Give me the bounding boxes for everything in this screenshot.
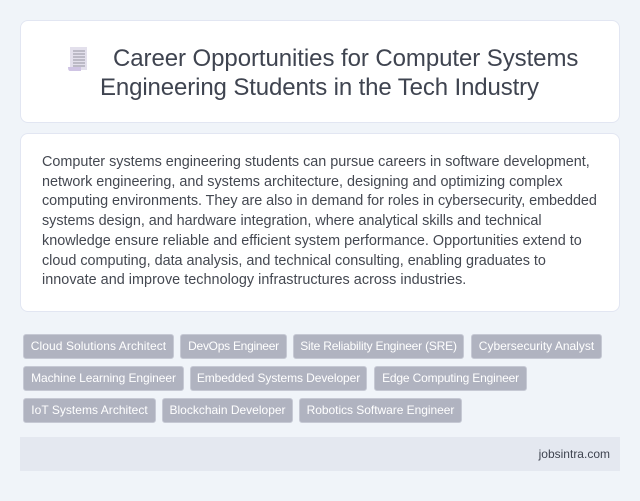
title line 1: Career Opportunities for Computer Systems xyxy=(113,45,578,72)
icon: document scroll xyxy=(68,47,87,71)
footer source text: jobsintra.com xyxy=(539,447,610,461)
tag list: Machine Learning Engineer xyxy=(31,371,176,385)
tag list: Embedded Systems Developer xyxy=(197,371,360,385)
description text: computing environments. They are also in demand for roles in cybersecurity, embedded xyxy=(42,193,597,209)
tag list: Cybersecurity Analyst xyxy=(479,339,594,353)
tag list: DevOps Engineer xyxy=(188,339,279,353)
tag list xyxy=(23,334,602,423)
description text: innovate and improve technology infrastructures across industries. xyxy=(42,272,466,288)
description text: Computer systems engineering students can pursue careers in software development, xyxy=(42,154,590,170)
tag list: Robotics Software Engineer xyxy=(307,403,454,417)
tag list: Edge Computing Engineer xyxy=(382,371,519,385)
description text: knowledge ensure reliable and efficient system performance. Opportunities extend to xyxy=(42,233,582,249)
tag list: Site Reliability Engineer (SRE) xyxy=(300,339,457,353)
description text xyxy=(42,154,597,288)
panel: title card xyxy=(20,20,620,123)
title line 2: Engineering Students in the Tech Industry xyxy=(100,74,539,101)
footer bar xyxy=(20,437,620,471)
description text: systems design, and hardware integration, where analytical skills and technical xyxy=(42,213,542,229)
tag list: IoT Systems Architect xyxy=(31,403,148,417)
description text: network engineering, and systems architecture, designing and optimizing complex xyxy=(42,174,563,190)
panel: description card xyxy=(20,133,620,312)
tag list: Blockchain Developer xyxy=(169,403,286,417)
description text: cloud computing, data analysis, and technical consulting, enabling graduates to xyxy=(42,253,546,269)
tag list: Cloud Solutions Architect xyxy=(31,339,166,353)
